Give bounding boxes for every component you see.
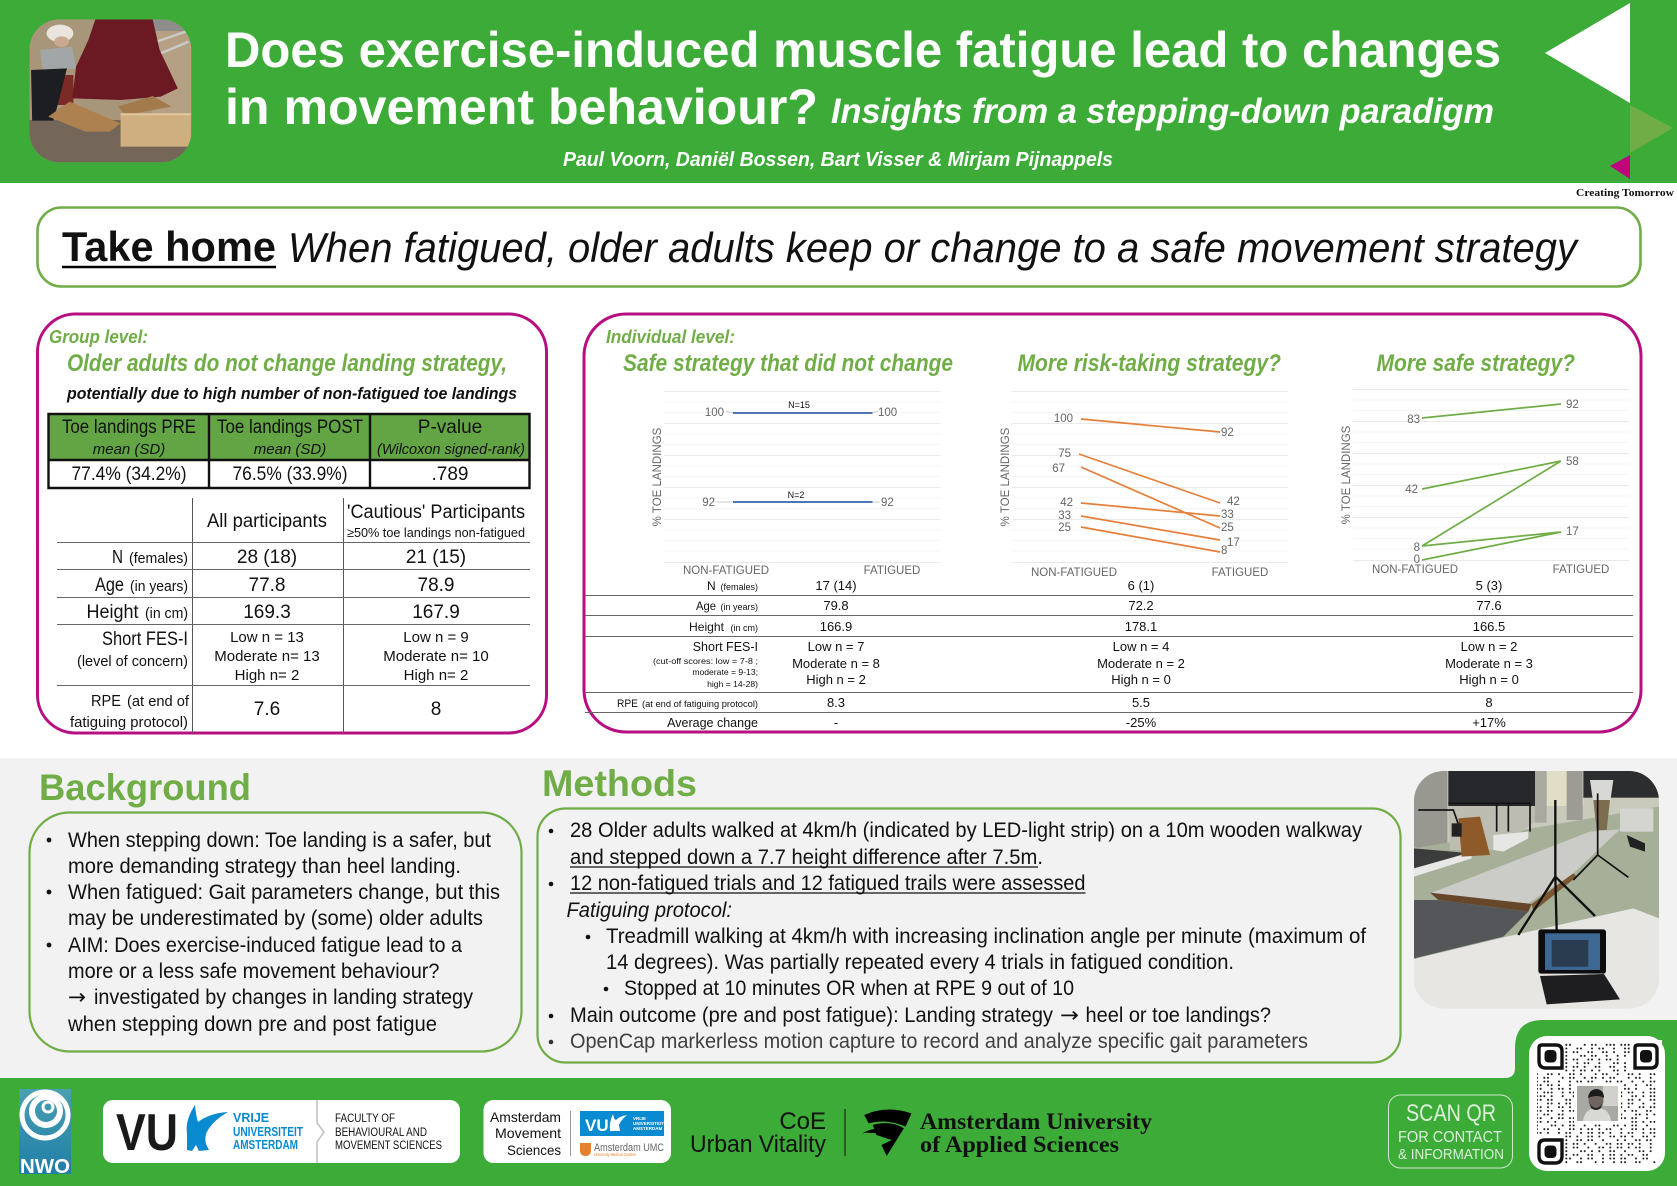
logo: CoE Urban Vitality: Urban Vitality — [690, 1131, 826, 1158]
chart: safe strategy lines: FATIGUED — [864, 565, 920, 577]
table: toe landings: mean (SD) — [254, 441, 326, 458]
table: toe landings: mean (SD) — [93, 441, 165, 458]
table: participants: High n= 2 — [235, 667, 299, 684]
chart: risk-taking lines: 75 — [1058, 448, 1071, 460]
grey section background — [0, 758, 1677, 1078]
heading: safe strategy: Safe strategy that did not change — [623, 350, 953, 377]
logo: Amsterdam University of Applied Sciences: Amsterdam University — [920, 1109, 1153, 1134]
logo: Amsterdam Movement Sciences — [484, 1100, 671, 1163]
panel: background: AIM: Does exercise-induced fatigue lead to a — [68, 934, 462, 957]
logo: VU faculty: VU — [116, 1104, 178, 1162]
logo: VU faculty: AMSTERDAM — [233, 1138, 298, 1152]
table: individual level characteristics: Short FES-I — [693, 640, 758, 654]
table: participants: RPE — [91, 693, 121, 710]
chart: safe strategy lines: 92 — [702, 497, 715, 509]
table: participants: 21 (15) — [406, 547, 466, 568]
authors: Paul Voorn, Daniël Bossen, Bart Visser & Mirjam Pijnappels — [563, 149, 1113, 171]
table: participants: (in cm) — [145, 605, 188, 622]
chart: risk-taking lines: 92 — [1221, 427, 1234, 439]
panel: background: investigated by changes in landing strategy — [94, 986, 473, 1009]
title: in movement behaviour? — [225, 79, 818, 135]
table: participants: ≥50% toe landings non-fatigued — [347, 525, 525, 540]
table: participants: Low n = 13 — [230, 629, 304, 646]
panel: methods: → — [1060, 1003, 1079, 1027]
chart: risk-taking lines: NON-FATIGUED — [1031, 567, 1117, 579]
table: individual level characteristics: 166.5 — [1473, 619, 1505, 634]
logo: NWO: NWO — [20, 1156, 70, 1178]
chart: more safe lines: FATIGUED — [1553, 564, 1609, 576]
header banner — [0, 0, 1677, 183]
logo: Amsterdam Movement Sciences: VU — [585, 1116, 609, 1135]
chart: risk-taking lines: 17 — [1227, 537, 1240, 549]
logo: Amsterdam Movement Sciences: Amsterdam UMC — [594, 1142, 664, 1154]
table: participants: Age — [95, 575, 124, 596]
table: participants: Short FES-I — [102, 629, 188, 650]
chart: more safe lines: NON-FATIGUED — [1372, 564, 1458, 576]
table: individual level characteristics: Age — [696, 599, 716, 613]
table: individual level characteristics: Moderate n = 8 — [792, 656, 880, 671]
panel: background: may be underestimated by (some) older adults — [68, 907, 483, 930]
table: individual level characteristics: High n = 2 — [806, 672, 866, 687]
chart: more safe lines: 83 — [1407, 414, 1420, 426]
panel: take home: When fatigued, older adults keep or change to a safe movement strategy — [288, 224, 1580, 271]
table: individual level characteristics: N — [707, 579, 716, 593]
chart: safe strategy lines: 100 — [878, 407, 897, 419]
table: participants: N — [112, 547, 123, 567]
table: participants: Moderate n= 13 — [214, 648, 320, 665]
panel: background: When stepping down: Toe landing is a safer, but — [68, 829, 491, 852]
panel: individual level: Individual level: — [606, 327, 735, 347]
panel: methods: Treadmill walking at 4km/h with increasing inclination angle per minute (maximum of — [606, 925, 1366, 948]
logo: NWO — [19, 1089, 71, 1178]
table: individual level characteristics: 77.6 — [1476, 598, 1502, 613]
table: toe landings: (Wilcoxon signed-rank) — [377, 441, 525, 458]
table: individual level characteristics: 178.1 — [1125, 619, 1157, 634]
logo: Amsterdam University of Applied Sciences: of Applied Sciences — [920, 1132, 1119, 1157]
chart: safe strategy lines: 100 — [705, 407, 724, 419]
logo: VU faculty: FACULTY OF — [335, 1113, 395, 1125]
panel: methods: heel or toe landings? — [1086, 1004, 1271, 1027]
heading: risk-taking: More risk-taking strategy? — [1018, 350, 1281, 377]
table: individual level characteristics: Average change — [667, 716, 758, 730]
chart: risk-taking lines: 8 — [1221, 545, 1227, 557]
chart: more safe lines: 17 — [1566, 526, 1579, 538]
panel: group level: Group level: — [49, 327, 148, 347]
logo triangles — [1545, 3, 1673, 179]
table: toe landings: 76.5% (33.9%) — [232, 464, 348, 485]
chart: more safe lines — [1341, 390, 1629, 576]
table: individual level characteristics: 166.9 — [820, 619, 852, 634]
chart: risk-taking lines: 100 — [1054, 413, 1073, 425]
table: individual level characteristics: (at end of fatiguing protocol) — [642, 699, 758, 709]
table: individual level characteristics: (cut-off scores: low = 7-8 ; — [653, 656, 758, 666]
table: individual level characteristics: 72.2 — [1128, 598, 1154, 613]
chart: more safe lines: 0 — [1414, 554, 1420, 566]
chart: risk-taking lines: FATIGUED — [1212, 567, 1268, 579]
chart: more safe lines: % TOE LANDINGS — [1341, 425, 1353, 524]
table: individual level characteristics: Height — [689, 620, 725, 634]
table: participants: (females) — [129, 550, 188, 567]
table: participants: (level of concern) — [77, 653, 188, 670]
table: individual level characteristics: 8 — [1485, 695, 1493, 710]
table: individual level characteristics: 17 (14) — [815, 578, 857, 593]
table: individual level characteristics: RPE — [617, 698, 638, 710]
logo: VU faculty: VRIJE — [233, 1111, 269, 1125]
logo: VU faculty: MOVEMENT SCIENCES — [335, 1140, 442, 1152]
qr finder patterns — [1539, 1040, 1662, 1163]
title: Insights from a stepping-down paradigm — [831, 92, 1494, 131]
logo: Amsterdam University of Applied Sciences — [863, 1109, 1153, 1157]
panel: take home — [38, 208, 1640, 286]
icon: AUAS wing — [863, 1110, 911, 1156]
table: participants: All participants — [207, 511, 327, 532]
logo: Amsterdam Movement Sciences: Movement — [495, 1125, 561, 1141]
header photo: stepping down — [29, 19, 191, 162]
chart: risk-taking lines: 25 — [1058, 522, 1071, 534]
qr portrait — [1574, 1083, 1621, 1124]
logo: VU faculty: UNIVERSITEIT — [233, 1125, 303, 1139]
logo: CoE Urban Vitality: CoE — [779, 1108, 826, 1135]
table: individual level characteristics: Low n = 2 — [1461, 639, 1517, 654]
table: participants: Low n = 9 — [403, 629, 469, 646]
table: individual level characteristics: 6 (1) — [1128, 578, 1154, 593]
table: individual level characteristics: (in cm) — [730, 623, 758, 633]
logo: Amsterdam Movement Sciences: Amsterdam — [490, 1109, 561, 1125]
table: participants: fatiguing protocol) — [70, 714, 188, 731]
chart: safe strategy lines: N=2 — [788, 490, 804, 500]
chart: risk-taking lines: 42 — [1227, 496, 1240, 508]
panel: individual level — [584, 314, 1641, 732]
logo: Amsterdam Movement Sciences: AMSTERDAM — [633, 1126, 662, 1131]
table: individual level characteristics: 5.5 — [1132, 695, 1150, 710]
title: Does exercise-induced muscle fatigue lead to changes — [225, 22, 1501, 78]
panel: methods: 12 non-fatigued trials and 12 fatigued trails were assessed — [570, 872, 1086, 895]
chart: risk-taking lines: 67 — [1052, 463, 1065, 475]
callout: scan QR: SCAN QR — [1406, 1100, 1496, 1127]
chart: risk-taking lines: 33 — [1221, 509, 1234, 521]
table: individual level characteristics: Moderate n = 2 — [1097, 656, 1185, 671]
chart: safe strategy lines: 92 — [881, 497, 894, 509]
table: participants: Moderate n= 10 — [383, 648, 489, 665]
table: individual level characteristics: 5 (3) — [1476, 578, 1502, 593]
table: individual level characteristics: Low n = 4 — [1113, 639, 1169, 654]
QR code — [1529, 1036, 1665, 1171]
table: participants: 77.8 — [249, 575, 285, 596]
chart: more safe lines: 42 — [1405, 484, 1418, 496]
qr tab — [1505, 1020, 1677, 1078]
table: toe landings: P-value — [418, 417, 482, 438]
table: individual level characteristics: 8.3 — [827, 695, 845, 710]
table: individual level characteristics: +17% — [1472, 715, 1506, 730]
table: toe landings: .789 — [432, 464, 468, 485]
chart: safe strategy lines: N=15 — [788, 400, 810, 410]
table: toe landings — [48, 414, 530, 488]
panel: background: more or a less safe movement behaviour? — [68, 960, 440, 983]
heading: background: Background — [39, 767, 251, 808]
table: participants: 169.3 — [243, 602, 291, 623]
table: individual level characteristics: high = 14-28) — [707, 679, 758, 689]
panel: background: When fatigued: Gait parameters change, but this — [68, 881, 500, 904]
chart: risk-taking lines: 25 — [1221, 522, 1234, 534]
table: individual level characteristics: Low n = 7 — [808, 639, 864, 654]
logo: Amsterdam Movement Sciences: VRIJE — [633, 1116, 646, 1121]
callout: scan QR: & INFORMATION — [1398, 1146, 1504, 1163]
table: individual level characteristics — [585, 578, 1633, 730]
table: individual level characteristics: moderate = 9-13; — [692, 667, 758, 677]
table: individual level characteristics: - — [834, 715, 838, 730]
logo: VU faculty: BEHAVIOURAL AND — [335, 1127, 427, 1139]
icon: griffin — [187, 1105, 228, 1151]
table: participants: 7.6 — [254, 699, 280, 720]
table: participants: (in years) — [130, 578, 188, 595]
table: participants: 167.9 — [412, 602, 460, 623]
panel: group level — [38, 314, 546, 733]
photo: lab setup — [1414, 771, 1659, 1008]
panel: methods: 14 degrees). Was partially repeated every 4 trials in fatigued condition. — [606, 951, 1234, 974]
panel: background: more demanding strategy than heel landing. — [68, 855, 461, 878]
chart: more safe lines: 92 — [1566, 399, 1579, 411]
logo: Amsterdam Movement Sciences: University Medical Centers — [594, 1152, 637, 1157]
table: individual level characteristics: 79.8 — [823, 598, 849, 613]
heading: more safe: More safe strategy? — [1376, 350, 1575, 377]
tagline: Creating Tomorrow: Creating Tomorrow — [1576, 187, 1674, 199]
table: participants: High n= 2 — [404, 667, 468, 684]
table: toe landings: Toe landings POST — [217, 417, 363, 438]
table: individual level characteristics: (in years) — [720, 602, 758, 612]
heading: methods: Methods — [542, 763, 697, 804]
panel: group level: Older adults do not change landing strategy, — [67, 350, 507, 377]
chart: risk-taking lines: % TOE LANDINGS — [1000, 427, 1012, 526]
table: individual level characteristics: Moderate n = 3 — [1445, 656, 1533, 671]
chart: risk-taking lines: 42 — [1060, 497, 1073, 509]
chart: more safe lines: 8 — [1414, 542, 1420, 554]
chart: safe strategy lines — [652, 392, 940, 577]
title — [225, 22, 1501, 135]
panel: methods: 28 Older adults walked at 4km/h (indicated by LED-light strip) on a 10m wooden walkway — [570, 819, 1362, 842]
table: participants: (at end of — [127, 693, 190, 710]
table: participants: 'Cautious' Participants — [347, 502, 525, 523]
logo: CoE Urban Vitality — [690, 1108, 845, 1158]
table: toe landings: Toe landings PRE — [62, 417, 196, 438]
panel: methods: OpenCap markerless motion capture to record and analyze specific gait parameters — [570, 1030, 1308, 1053]
panel: methods — [538, 808, 1400, 1062]
table: participants: 78.9 — [418, 575, 454, 596]
panel: background: → — [68, 985, 86, 1009]
callout: scan QR — [1388, 1095, 1512, 1168]
panel: methods: Stopped at 10 minutes OR when at RPE 9 out of 10 — [624, 977, 1074, 1000]
chart: safe strategy lines: NON-FATIGUED — [683, 565, 769, 577]
logo: Amsterdam Movement Sciences: UNIVERSITEIT — [633, 1121, 664, 1126]
table: participants: 28 (18) — [237, 547, 297, 568]
panel: methods: Fatiguing protocol: — [566, 899, 732, 922]
table: participants: Height — [86, 602, 139, 623]
chart: risk-taking lines: 33 — [1058, 510, 1071, 522]
table: individual level characteristics: -25% — [1126, 715, 1157, 730]
chart: more safe lines: 58 — [1566, 456, 1579, 468]
logo: VU faculty — [103, 1100, 460, 1163]
panel: group level: potentially due to high number of non-fatigued toe landings — [66, 384, 517, 403]
chart: safe strategy lines: % TOE LANDINGS — [652, 427, 664, 526]
panel: background: when stepping down pre and post fatigue — [67, 1013, 437, 1036]
footer banner — [0, 1020, 1677, 1186]
table: individual level characteristics: (females) — [720, 582, 758, 592]
table: participants — [57, 498, 530, 733]
logo: Amsterdam Movement Sciences: Sciences — [507, 1142, 561, 1158]
table: individual level characteristics: High n = 0 — [1459, 672, 1519, 687]
chart: risk-taking lines — [1000, 392, 1288, 579]
panel: methods: and stepped down a 7.7 height difference after 7.5m. — [570, 846, 1043, 869]
table: individual level characteristics: High n = 0 — [1111, 672, 1171, 687]
panel: take home: Take home — [62, 223, 276, 270]
callout: scan QR: FOR CONTACT — [1398, 1129, 1502, 1146]
table: participants: 8 — [431, 699, 441, 720]
panel: background — [30, 812, 522, 1052]
panel: methods: Main outcome (pre and post fatigue): Landing strategy — [570, 1004, 1053, 1027]
table: toe landings: 77.4% (34.2%) — [72, 464, 186, 485]
